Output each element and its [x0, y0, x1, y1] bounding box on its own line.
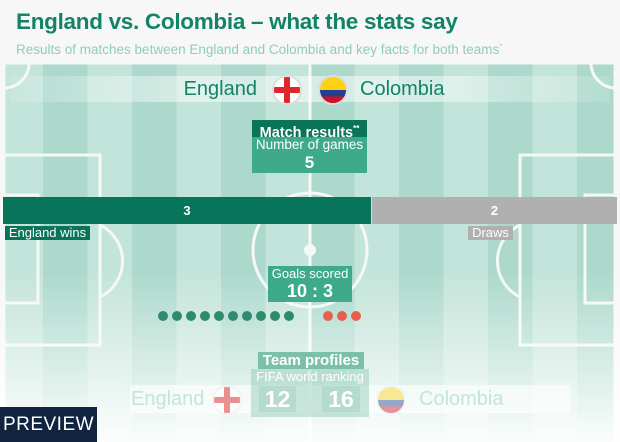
FIFA ranking box: FIFA world ranking — [256, 369, 364, 384]
goals scored box — [268, 266, 352, 302]
label: draws: Draws — [472, 225, 509, 240]
score: 10 : 3 — [287, 281, 333, 301]
Colombia label: Colombia — [360, 78, 444, 100]
preview badge: PREVIEW — [3, 414, 94, 435]
bar chart: results — [3, 197, 617, 224]
bottom team band — [130, 385, 570, 413]
subtitle: Results of matches between England and Colombia and key facts for both teams* — [16, 42, 502, 57]
icon: Colombia flag — [318, 75, 348, 105]
icon: England flag — [272, 75, 302, 105]
FIFA ranking box — [251, 369, 369, 417]
heading: Match results** — [260, 124, 359, 141]
bar: draws — [372, 197, 617, 224]
Colombia goals — [323, 311, 361, 321]
ranking Colombia — [322, 386, 360, 412]
ranking Colombia: 16 — [328, 386, 354, 412]
icon: England flag faded — [212, 385, 242, 415]
bar: draws: 2 — [491, 203, 498, 218]
icon: Colombia flag faded — [376, 385, 406, 415]
team header band — [10, 76, 610, 102]
England label: England — [184, 78, 257, 100]
preview badge — [0, 407, 97, 442]
bar: England wins: 3 — [183, 203, 191, 218]
goals scored box: Goals scored — [272, 266, 348, 281]
number of games — [252, 137, 367, 173]
England label faded: England — [131, 388, 204, 410]
ranking England: 12 — [265, 386, 290, 412]
match results box — [252, 120, 367, 173]
title: England vs. Colombia – what the stats say — [16, 9, 458, 34]
Colombia label faded: Colombia — [419, 388, 503, 410]
goal dots — [158, 311, 361, 321]
number of games: Number of games — [256, 137, 363, 152]
number of games: 5 — [305, 153, 314, 172]
England goals — [158, 311, 294, 321]
heading — [252, 120, 367, 137]
team profiles heading: Team profiles — [263, 352, 359, 369]
label: England wins: England wins — [9, 225, 86, 240]
bar: England wins — [3, 197, 371, 224]
ranking England — [259, 386, 296, 412]
